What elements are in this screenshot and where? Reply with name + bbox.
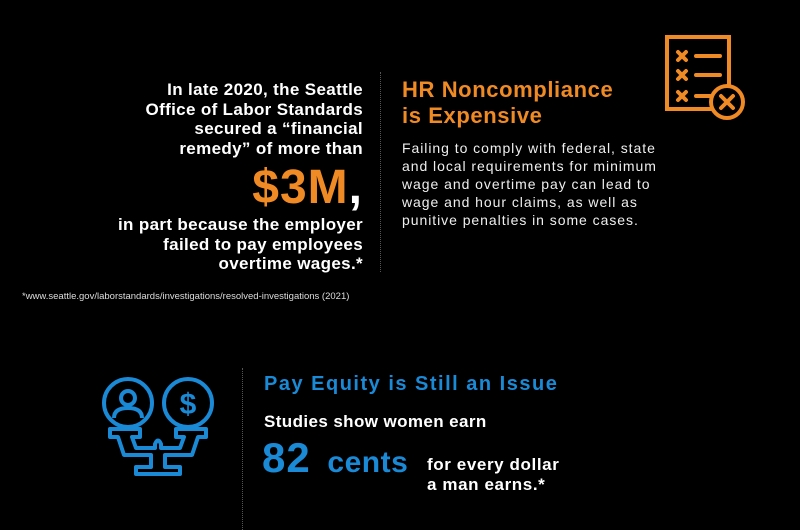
icon: scale: $ [180, 388, 197, 421]
text block: seattle remedy: Office of Labor Standards [146, 100, 363, 118]
text block: failing to comply [402, 140, 657, 228]
text block: failing to comply: wage and overtime pay can lead to [402, 176, 650, 192]
text block: failing to comply: and local requirements for minimum [402, 158, 657, 174]
text block: seattle remedy: secured a “financial [194, 119, 363, 138]
text block: seattle remedy [118, 80, 363, 273]
text block: seattle remedy: remedy” of more than in part because the employer [118, 138, 363, 234]
text block: seattle remedy: In late 2020, the Seattle [167, 80, 363, 99]
text block: failing to comply: Failing to comply with federal, state [402, 140, 656, 156]
text block: for every dollar: a man earns.* [427, 475, 545, 494]
text block: failing to comply: wage and hour claims, as well as [402, 194, 638, 210]
icon: checklist with x [665, 35, 745, 120]
text block: seattle remedy: failed to pay employees [163, 234, 363, 254]
divider 1 [380, 72, 381, 272]
text block: for every dollar [427, 455, 559, 494]
text block: studies show: Studies show women earn [264, 412, 487, 431]
icon: scale [102, 377, 214, 476]
text block: failing to comply: punitive penalties in some cases. [402, 212, 639, 228]
big number: 82 cents: 82 cents [262, 434, 408, 481]
heading: pay equity: Pay Equity is Still an Issue [264, 373, 558, 395]
footnote: *www.seattle.gov/laborstandards/investigations/resolved-investigations (2021) [22, 291, 349, 302]
text block: seattle remedy: overtime wages.* [218, 254, 363, 273]
divider 2 [242, 368, 243, 530]
heading: HR noncompliance: HR Noncompliance [402, 77, 613, 102]
text block: for every dollar: for every dollar [427, 455, 559, 474]
heading: HR noncompliance: is Expensive [402, 103, 542, 128]
big number: $3M: $3M, [252, 161, 363, 214]
heading: HR noncompliance [402, 77, 613, 128]
